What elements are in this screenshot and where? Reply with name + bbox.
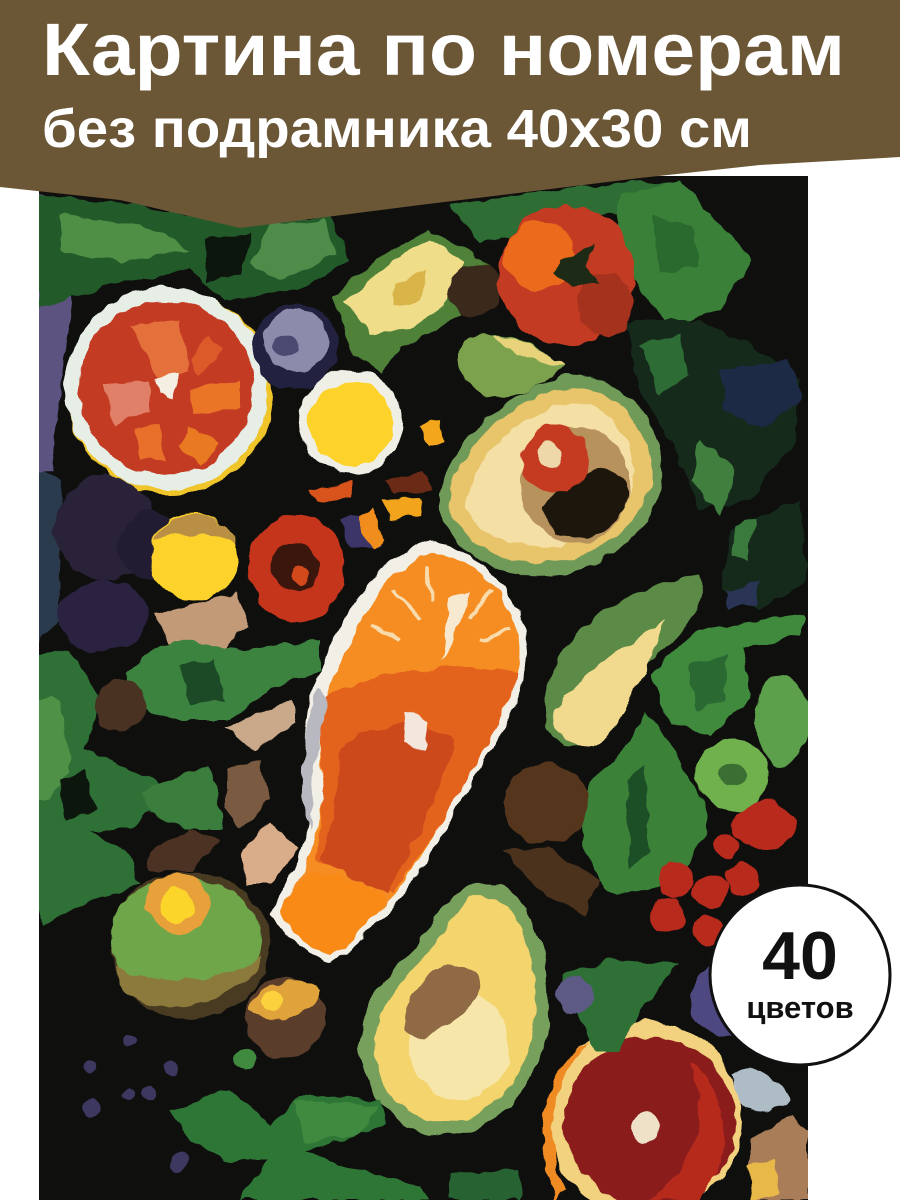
green apple: [110, 871, 270, 1019]
badge: 40 colours: [710, 885, 890, 1065]
small nut: [245, 978, 325, 1058]
green avocado slice: [457, 334, 565, 398]
salmon steak: [268, 540, 528, 962]
subtitle: без подрамника 40х30 см: [42, 99, 752, 159]
blue berries right: [557, 964, 788, 1111]
small seeds: [310, 420, 445, 550]
header banner: [0, 0, 900, 228]
salmon streaks: [370, 565, 510, 640]
walnut left: [155, 592, 248, 650]
yellow ball: [150, 513, 238, 601]
top greens: [30, 180, 808, 610]
tomato slice: [249, 514, 345, 622]
title: Картина по номерам: [42, 8, 845, 91]
painting: [30, 176, 808, 1200]
blackberries: [55, 476, 182, 652]
yellow cauliflower: [330, 230, 501, 375]
left greens: [30, 640, 320, 925]
small dark berries: [82, 1033, 189, 1171]
grapefruit: [66, 287, 273, 495]
avocado top: [440, 375, 662, 576]
pine cones: [500, 763, 600, 915]
tomato: [498, 205, 634, 345]
avocado bottom: [360, 882, 548, 1135]
walnuts right: [748, 1115, 808, 1200]
purple backdrop: [39, 194, 72, 643]
badge: 40 colours: 40: [762, 918, 838, 994]
badge: 40 colours: цветов: [746, 990, 854, 1025]
walnuts left: [150, 700, 298, 885]
bottom greens: [170, 960, 680, 1200]
right greens: [545, 575, 808, 896]
lemon slice: [299, 370, 403, 474]
bottom grapefruit: [543, 1021, 742, 1200]
blueberry: [253, 303, 339, 389]
cherries: [650, 801, 797, 945]
